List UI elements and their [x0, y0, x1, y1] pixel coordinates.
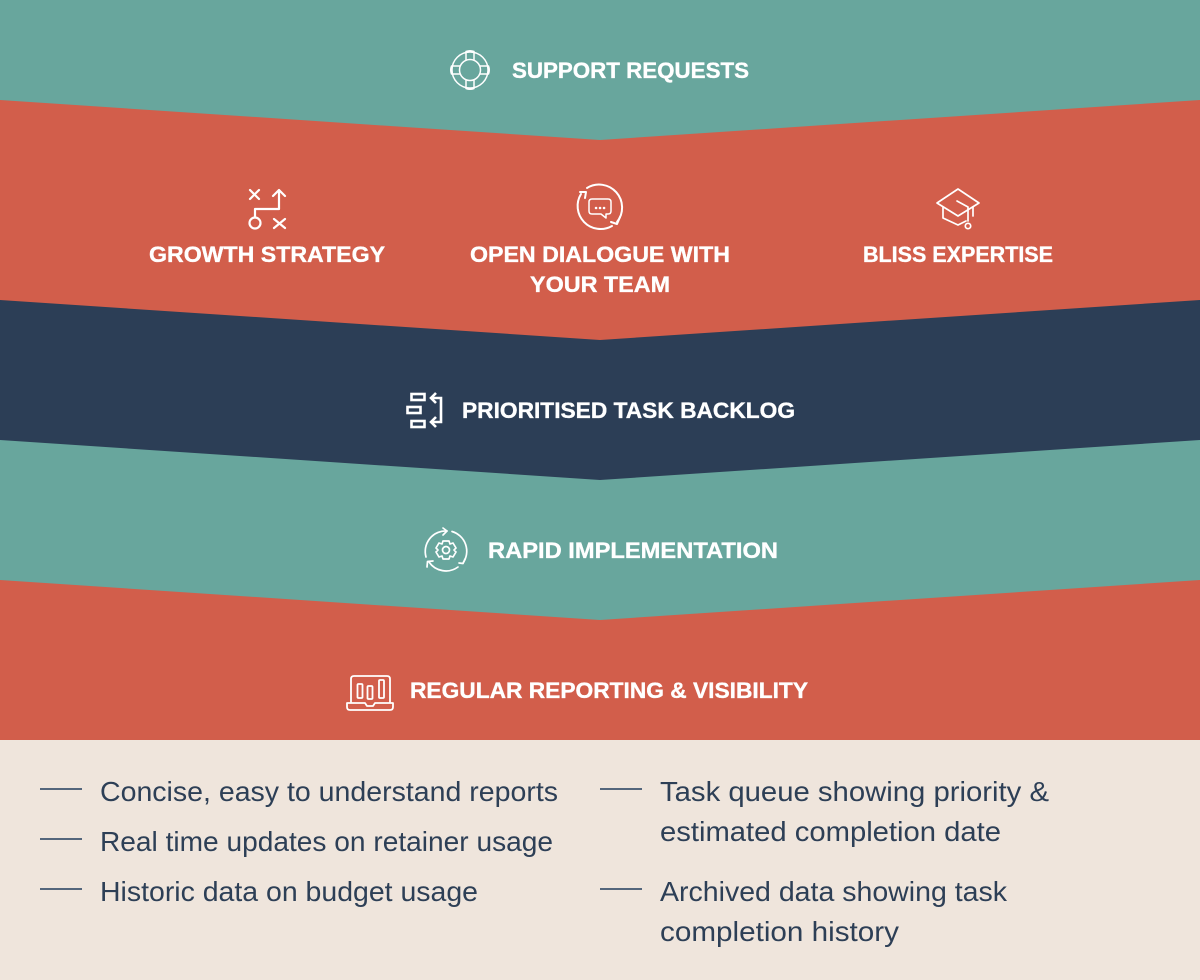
icon: task backlog: [408, 393, 441, 427]
heading: open dialogue with your team: [470, 242, 730, 297]
panel: details background: [0, 740, 1200, 980]
list: reporting benefits: Historic data on budget usage: [100, 876, 478, 907]
heading: support requests: SUPPORT REQUESTS: [512, 58, 749, 83]
icon: rapid implementation gear: [425, 528, 467, 571]
list: task queue benefits: [600, 776, 1049, 947]
band: rapid implementation: [0, 440, 1200, 620]
icon: life ring: [451, 51, 489, 89]
list: reporting benefits: Concise, easy to understand reports: [100, 776, 558, 807]
band: regular reporting: [0, 580, 1200, 740]
list: task queue benefits: estimated completion date: [660, 816, 1001, 847]
icon: laptop chart: [347, 676, 393, 710]
list: task queue benefits: completion history: [660, 916, 899, 947]
heading: open dialogue with your team: OPEN DIALOGUE WITH: [470, 242, 730, 267]
list: reporting benefits: [40, 776, 558, 907]
heading: growth strategy: GROWTH STRATEGY: [149, 242, 385, 267]
band: prioritised task backlog: [0, 300, 1200, 480]
heading: prioritised task backlog: PRIORITISED TASK BACKLOG: [462, 398, 795, 423]
icon: growth strategy play: [250, 190, 285, 228]
band: support requests: [0, 0, 1200, 140]
heading: rapid implementation: RAPID IMPLEMENTATION: [488, 538, 778, 563]
list: task queue benefits: Archived data showing task: [660, 876, 1008, 907]
heading: bliss expertise: BLISS EXPERTISE: [863, 242, 1053, 267]
icon: graduation cap: [937, 189, 979, 229]
list: reporting benefits: Real time updates on retainer usage: [100, 826, 553, 857]
band: strategy and dialogue: [0, 100, 1200, 340]
list: task queue benefits: Task queue showing priority &: [660, 776, 1049, 807]
heading: open dialogue with your team: YOUR TEAM: [530, 272, 670, 297]
heading: regular reporting and visibility: REGULAR REPORTING & VISIBILITY: [410, 678, 808, 703]
icon: dialogue cycle: [578, 185, 622, 229]
